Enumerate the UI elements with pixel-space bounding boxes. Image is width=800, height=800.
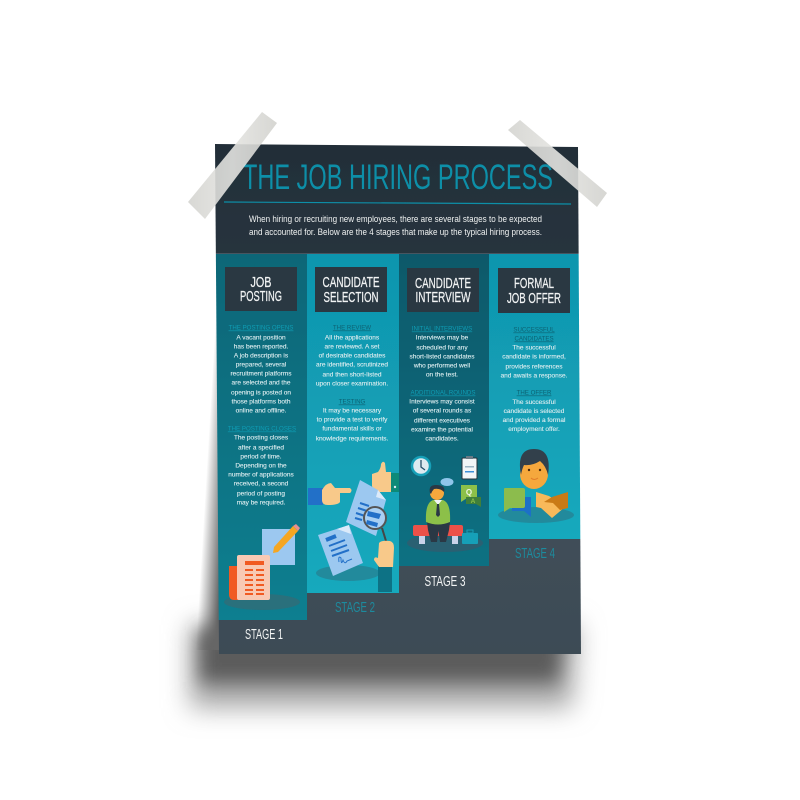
title: THE JOB HIRING PROCESS xyxy=(243,158,553,197)
text block: Interviews may be xyxy=(416,334,469,342)
text block: The posting closes xyxy=(234,434,289,442)
text block: number of applications xyxy=(228,472,294,478)
text block: short-listed candidates xyxy=(409,354,475,360)
text block: to provide a test to verify xyxy=(317,416,388,424)
text block: examine the potential xyxy=(411,426,473,434)
poster xyxy=(210,140,585,658)
text block: are reviewed. A set xyxy=(325,344,380,350)
text block: TESTING xyxy=(339,398,366,406)
stage 3 label: STAGE 3 xyxy=(424,573,466,590)
text block: recruitment platforms xyxy=(230,370,292,378)
text block: THE POSTING OPENS xyxy=(229,324,293,332)
text block: THE POSTING CLOSES xyxy=(228,426,296,432)
heading box: INTERVIEW xyxy=(416,289,471,306)
text block: of desirable candidates xyxy=(319,352,386,360)
stage 4 label: STAGE 4 xyxy=(515,545,555,562)
text block: It may be necessary xyxy=(323,408,382,414)
panel: stage 2 candidate selection xyxy=(307,254,399,616)
text block: knowledge requirements. xyxy=(316,436,389,442)
heading box: SELECTION xyxy=(324,289,378,306)
heading box: CANDIDATE xyxy=(322,274,380,291)
text block: and provided a formal xyxy=(503,417,566,424)
text block: fundamental skills or xyxy=(322,426,382,432)
text block: opening is posted on xyxy=(231,390,291,396)
text block: provides references xyxy=(505,364,563,370)
text block: and awaits a response. xyxy=(501,372,568,380)
text block: who performed well xyxy=(413,362,471,370)
text block: SUCCESSFUL xyxy=(513,326,555,334)
bottom band xyxy=(210,253,585,658)
text block xyxy=(501,326,568,433)
heading box xyxy=(498,268,570,313)
text block: All the applications xyxy=(325,334,380,342)
tape: right xyxy=(508,120,607,207)
text block: are identified, scrutinized xyxy=(316,362,388,368)
text block: upon closer examination. xyxy=(316,380,388,388)
text block: The successful xyxy=(512,399,556,406)
text block: scheduled for any xyxy=(416,344,468,352)
text block: are selected and the xyxy=(232,380,291,386)
heading box: JOB xyxy=(250,274,272,291)
text block: INITIAL INTERVIEWS xyxy=(412,326,472,332)
icon: candidate waiting: A xyxy=(471,498,476,505)
poster shadow xyxy=(190,300,578,708)
text block: THE REVIEW xyxy=(333,324,371,332)
text block: candidates. xyxy=(425,436,459,442)
text block xyxy=(228,324,296,506)
text block: and then short-listed xyxy=(323,372,382,378)
text block: The successful xyxy=(512,344,556,352)
heading box xyxy=(225,267,297,311)
panel: stage 1 job posting xyxy=(212,254,307,643)
heading box xyxy=(315,267,387,312)
tape: left xyxy=(188,112,277,219)
icon: candidate waiting xyxy=(407,456,483,552)
text block: may be required. xyxy=(237,500,286,506)
text block: employment offer. xyxy=(508,426,560,433)
text block: Depending on the xyxy=(235,462,287,470)
text block: on the test. xyxy=(426,372,458,378)
panel: stage 3 candidate interview xyxy=(399,254,489,590)
heading box xyxy=(407,268,479,312)
stage 2 label: STAGE 2 xyxy=(335,599,375,616)
text block: after a specified xyxy=(238,444,284,452)
top header band xyxy=(210,140,585,255)
heading box: POSTING xyxy=(240,288,282,305)
stage 1 label: STAGE 1 xyxy=(245,626,283,643)
icon: candidate waiting: Q xyxy=(466,488,472,497)
intro text: When hiring or recruiting new employees, there are several stages to be expected xyxy=(249,214,542,224)
intro text xyxy=(249,214,542,237)
text block: online and offline. xyxy=(236,408,287,414)
text block: received, a second xyxy=(234,480,289,488)
text block: those platforms both xyxy=(232,398,291,406)
text block: candidate is informed, xyxy=(502,354,566,360)
icon: handshake and candidate xyxy=(498,449,574,523)
text block: Interviews may consist xyxy=(409,398,475,406)
icon: newspaper and pencil xyxy=(224,524,300,610)
text block: different executives xyxy=(414,418,471,424)
text block: ADDITIONAL ROUNDS xyxy=(411,390,475,396)
text block: A vacant position xyxy=(236,334,286,342)
heading box: FORMAL xyxy=(514,275,554,292)
text block xyxy=(316,324,389,442)
panel: stage 4 formal job offer xyxy=(489,254,585,562)
text block: THE OFFER xyxy=(517,390,552,396)
text block: of several rounds as xyxy=(413,408,472,414)
text block: prepared, several xyxy=(236,362,287,368)
text block: A job description is xyxy=(234,352,289,360)
icon: hands and documents xyxy=(308,462,399,592)
text block xyxy=(409,326,475,442)
heading box: CANDIDATE xyxy=(415,275,471,292)
text block: CANDIDATES xyxy=(514,336,554,342)
intro text: and accounted for. Below are the 4 stages that make up the typical hiring process. xyxy=(249,227,542,237)
text block: has been reported. xyxy=(234,344,288,350)
text block: period of time. xyxy=(240,454,282,460)
heading box: JOB OFFER xyxy=(507,290,561,307)
text block: period of posting xyxy=(237,490,285,498)
text block: candidate is selected xyxy=(504,408,565,415)
